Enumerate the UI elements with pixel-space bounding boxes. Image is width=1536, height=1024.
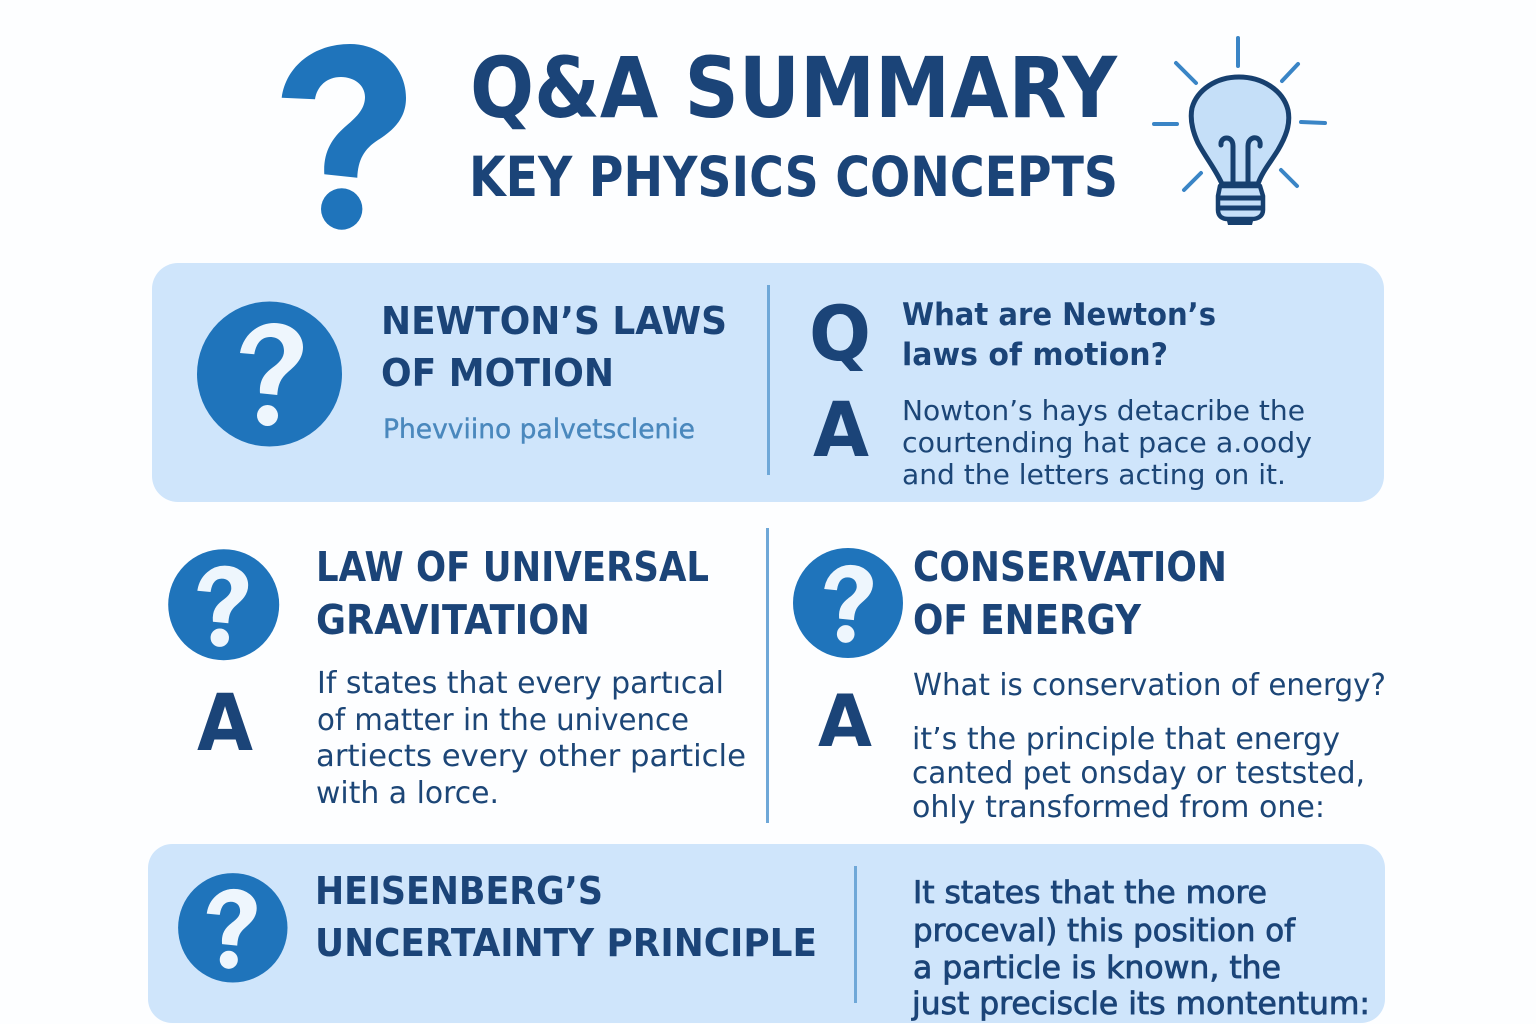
body: Heisenberg: just preciscle its montentum: bbox=[911, 986, 1370, 1022]
body: energy: it’s the principle that energy bbox=[912, 722, 1340, 757]
letter A, energy: A bbox=[818, 679, 872, 763]
section: law of universal gravitation bbox=[168, 543, 746, 811]
icon: question circle, gravitation bbox=[168, 549, 279, 660]
section: conservation of energy bbox=[793, 543, 1386, 825]
heading: gravitation: GRAVITATION bbox=[316, 596, 590, 644]
body: Heisenberg: It states that the more bbox=[913, 875, 1267, 911]
question: energy: What is conservation of energy? bbox=[913, 668, 1386, 703]
body: energy bbox=[912, 722, 1365, 825]
answer text: and the letters acting on it. bbox=[902, 458, 1286, 491]
subtitle: Phevviino palvetsclenie bbox=[383, 414, 695, 445]
answer text bbox=[902, 394, 1312, 491]
heading: Heisenberg bbox=[315, 869, 817, 965]
body: gravitation: If states that every partıcal bbox=[317, 666, 724, 701]
heading: Newton's laws: NEWTON’S LAWS bbox=[381, 299, 727, 343]
title: Q&A SUMMARY bbox=[470, 39, 1118, 137]
answer text: Nowton’s hays detacribe the bbox=[902, 394, 1305, 427]
letter A, gravitation: A bbox=[197, 679, 253, 769]
body: Heisenberg: a particle is known, the bbox=[913, 950, 1281, 986]
body: gravitation: artiects every other particle bbox=[316, 739, 746, 774]
letter A, Newton: A bbox=[813, 385, 869, 474]
title bbox=[469, 39, 1118, 209]
body: gravitation: with a lorce. bbox=[316, 776, 499, 811]
body: gravitation bbox=[316, 666, 746, 811]
icon: question circle, energy bbox=[793, 548, 903, 658]
heading: gravitation: LAW OF UNIVERSAL bbox=[316, 543, 709, 591]
icon: light bulb bbox=[1154, 38, 1325, 225]
body: Heisenberg: proceval) this position of bbox=[913, 913, 1296, 949]
heading: energy: OF ENERGY bbox=[913, 596, 1142, 644]
heading: gravitation bbox=[316, 543, 709, 644]
icon: question circle, Heisenberg bbox=[178, 873, 288, 982]
panel: Newton's laws of motion bbox=[152, 263, 1384, 502]
question text bbox=[902, 297, 1216, 373]
body: energy: ohly transformed from one: bbox=[912, 790, 1325, 825]
question text: What are Newton’s bbox=[902, 297, 1216, 333]
icon: large question mark bbox=[282, 44, 406, 230]
heading: energy bbox=[913, 543, 1227, 644]
body: energy: canted pet onsday or teststed, bbox=[912, 756, 1365, 791]
heading: Heisenberg: UNCERTAINTY PRINCIPLE bbox=[315, 921, 817, 965]
answer text: courtending hat pace a.oody bbox=[902, 426, 1312, 459]
title: KEY PHYSICS CONCEPTS bbox=[469, 145, 1118, 209]
heading: energy: CONSERVATION bbox=[913, 543, 1227, 591]
letter Q: Q bbox=[809, 289, 871, 378]
body: Heisenberg bbox=[911, 875, 1370, 1022]
icon: question circle, Newton bbox=[197, 302, 342, 446]
heading: Newton's laws bbox=[381, 299, 727, 395]
heading: Heisenberg: HEISENBERG’S bbox=[315, 869, 603, 913]
heading: Newton's laws: OF MOTION bbox=[381, 351, 614, 395]
body: gravitation: of matter in the univence bbox=[317, 703, 689, 738]
question text: laws of motion? bbox=[902, 337, 1168, 373]
panel: Heisenberg's uncertainty principle bbox=[148, 844, 1385, 1023]
